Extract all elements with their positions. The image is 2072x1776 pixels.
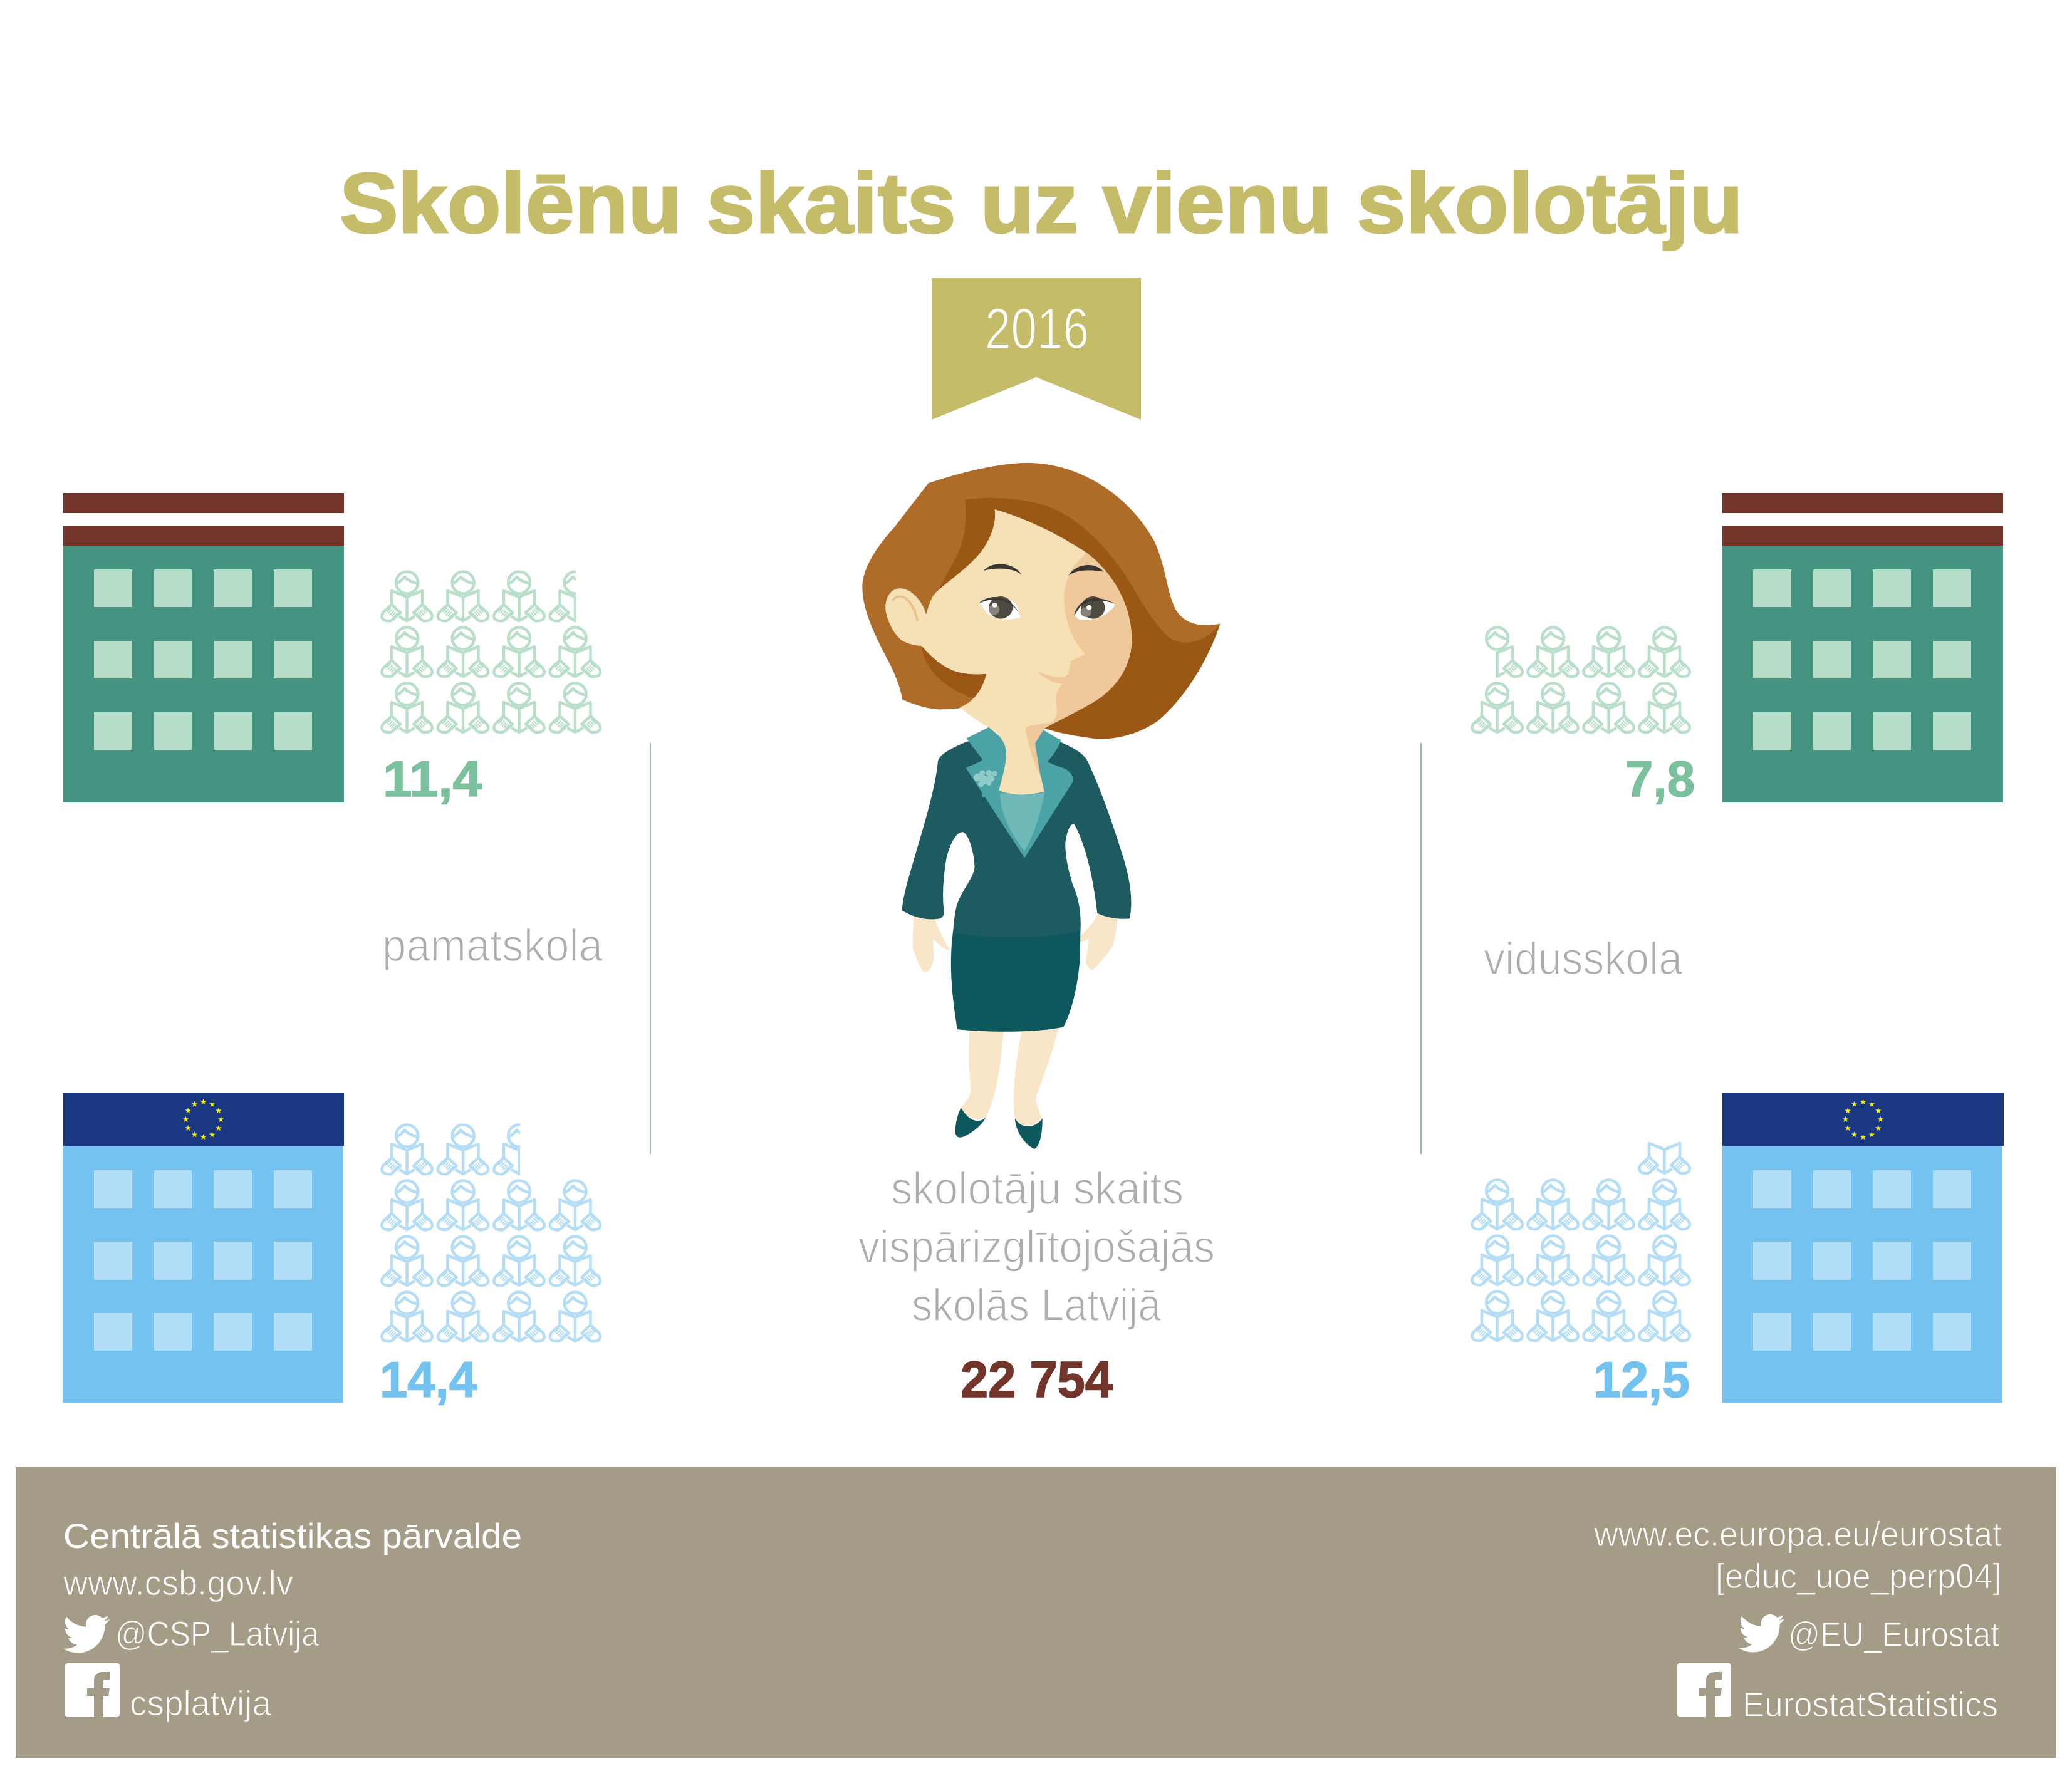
icon: facebook xyxy=(1677,1663,1731,1717)
label vidusskola: vidusskola xyxy=(1484,934,1683,984)
eyebrows xyxy=(984,564,1103,575)
year ribbon xyxy=(932,278,1141,420)
footer left: Latvian source: Centrālā statistikas pārvalde xyxy=(63,1516,522,1555)
pictogram: 7.8 pupils xyxy=(1472,628,1690,732)
building: EU secondary school xyxy=(1722,1093,2004,1403)
footer left: Latvian source: www.csb.gov.lv xyxy=(63,1563,293,1602)
icon: twitter xyxy=(1739,1614,1784,1652)
left eye xyxy=(979,596,1021,620)
teacher illustration xyxy=(862,463,1220,1149)
footer right: Eurostat source: [educ_uoe_perp04] xyxy=(1715,1556,2002,1596)
footer left: Latvian source xyxy=(63,1516,522,1723)
caption: teachers: skolotāju skaits xyxy=(891,1164,1184,1214)
caption: teachers: vispārizglītojošajās xyxy=(858,1222,1215,1272)
footer left: Latvian source: @CSP_Latvija xyxy=(115,1614,320,1653)
value 11,4: 11,4 xyxy=(383,751,482,808)
building: EU primary school xyxy=(63,1093,344,1403)
building: Latvia secondary school xyxy=(1722,493,2003,802)
year label: 2016 xyxy=(985,297,1089,361)
footer right: Eurostat source: EurostatStatistics xyxy=(1742,1685,1998,1724)
building: Latvia primary school xyxy=(63,493,344,802)
teacher body xyxy=(902,739,1131,1149)
icon: twitter xyxy=(63,1615,110,1653)
teacher head xyxy=(862,463,1220,797)
value 14,4: 14,4 xyxy=(380,1352,477,1408)
value 22 754: 22 754 xyxy=(961,1351,1113,1408)
icon: facebook xyxy=(65,1663,120,1717)
label pamatskola: pamatskola xyxy=(382,921,603,971)
footer right: Eurostat source xyxy=(1593,1514,2002,1724)
pictogram: 11.4 pupils xyxy=(382,571,600,732)
caption: teachers xyxy=(858,1164,1215,1331)
footer left: Latvian source: csplatvija xyxy=(130,1683,272,1723)
footer right: Eurostat source: www.ec.europa.eu/eurostat xyxy=(1593,1514,2002,1554)
pictogram: 12.5 pupils xyxy=(1472,1124,1690,1341)
title: Skolēnu skaits uz vienu skolotāju xyxy=(340,155,1743,251)
pictogram: 14.4 pupils xyxy=(382,1125,600,1341)
value 7,8: 7,8 xyxy=(1625,751,1695,808)
caption: teachers: skolās Latvijā xyxy=(912,1280,1162,1331)
value 12,5: 12,5 xyxy=(1593,1352,1690,1408)
footer right: Eurostat source: @EU_Eurostat xyxy=(1788,1614,1999,1654)
footer panel xyxy=(16,1467,2056,1758)
right eye xyxy=(1074,596,1115,620)
brooch xyxy=(974,770,997,787)
